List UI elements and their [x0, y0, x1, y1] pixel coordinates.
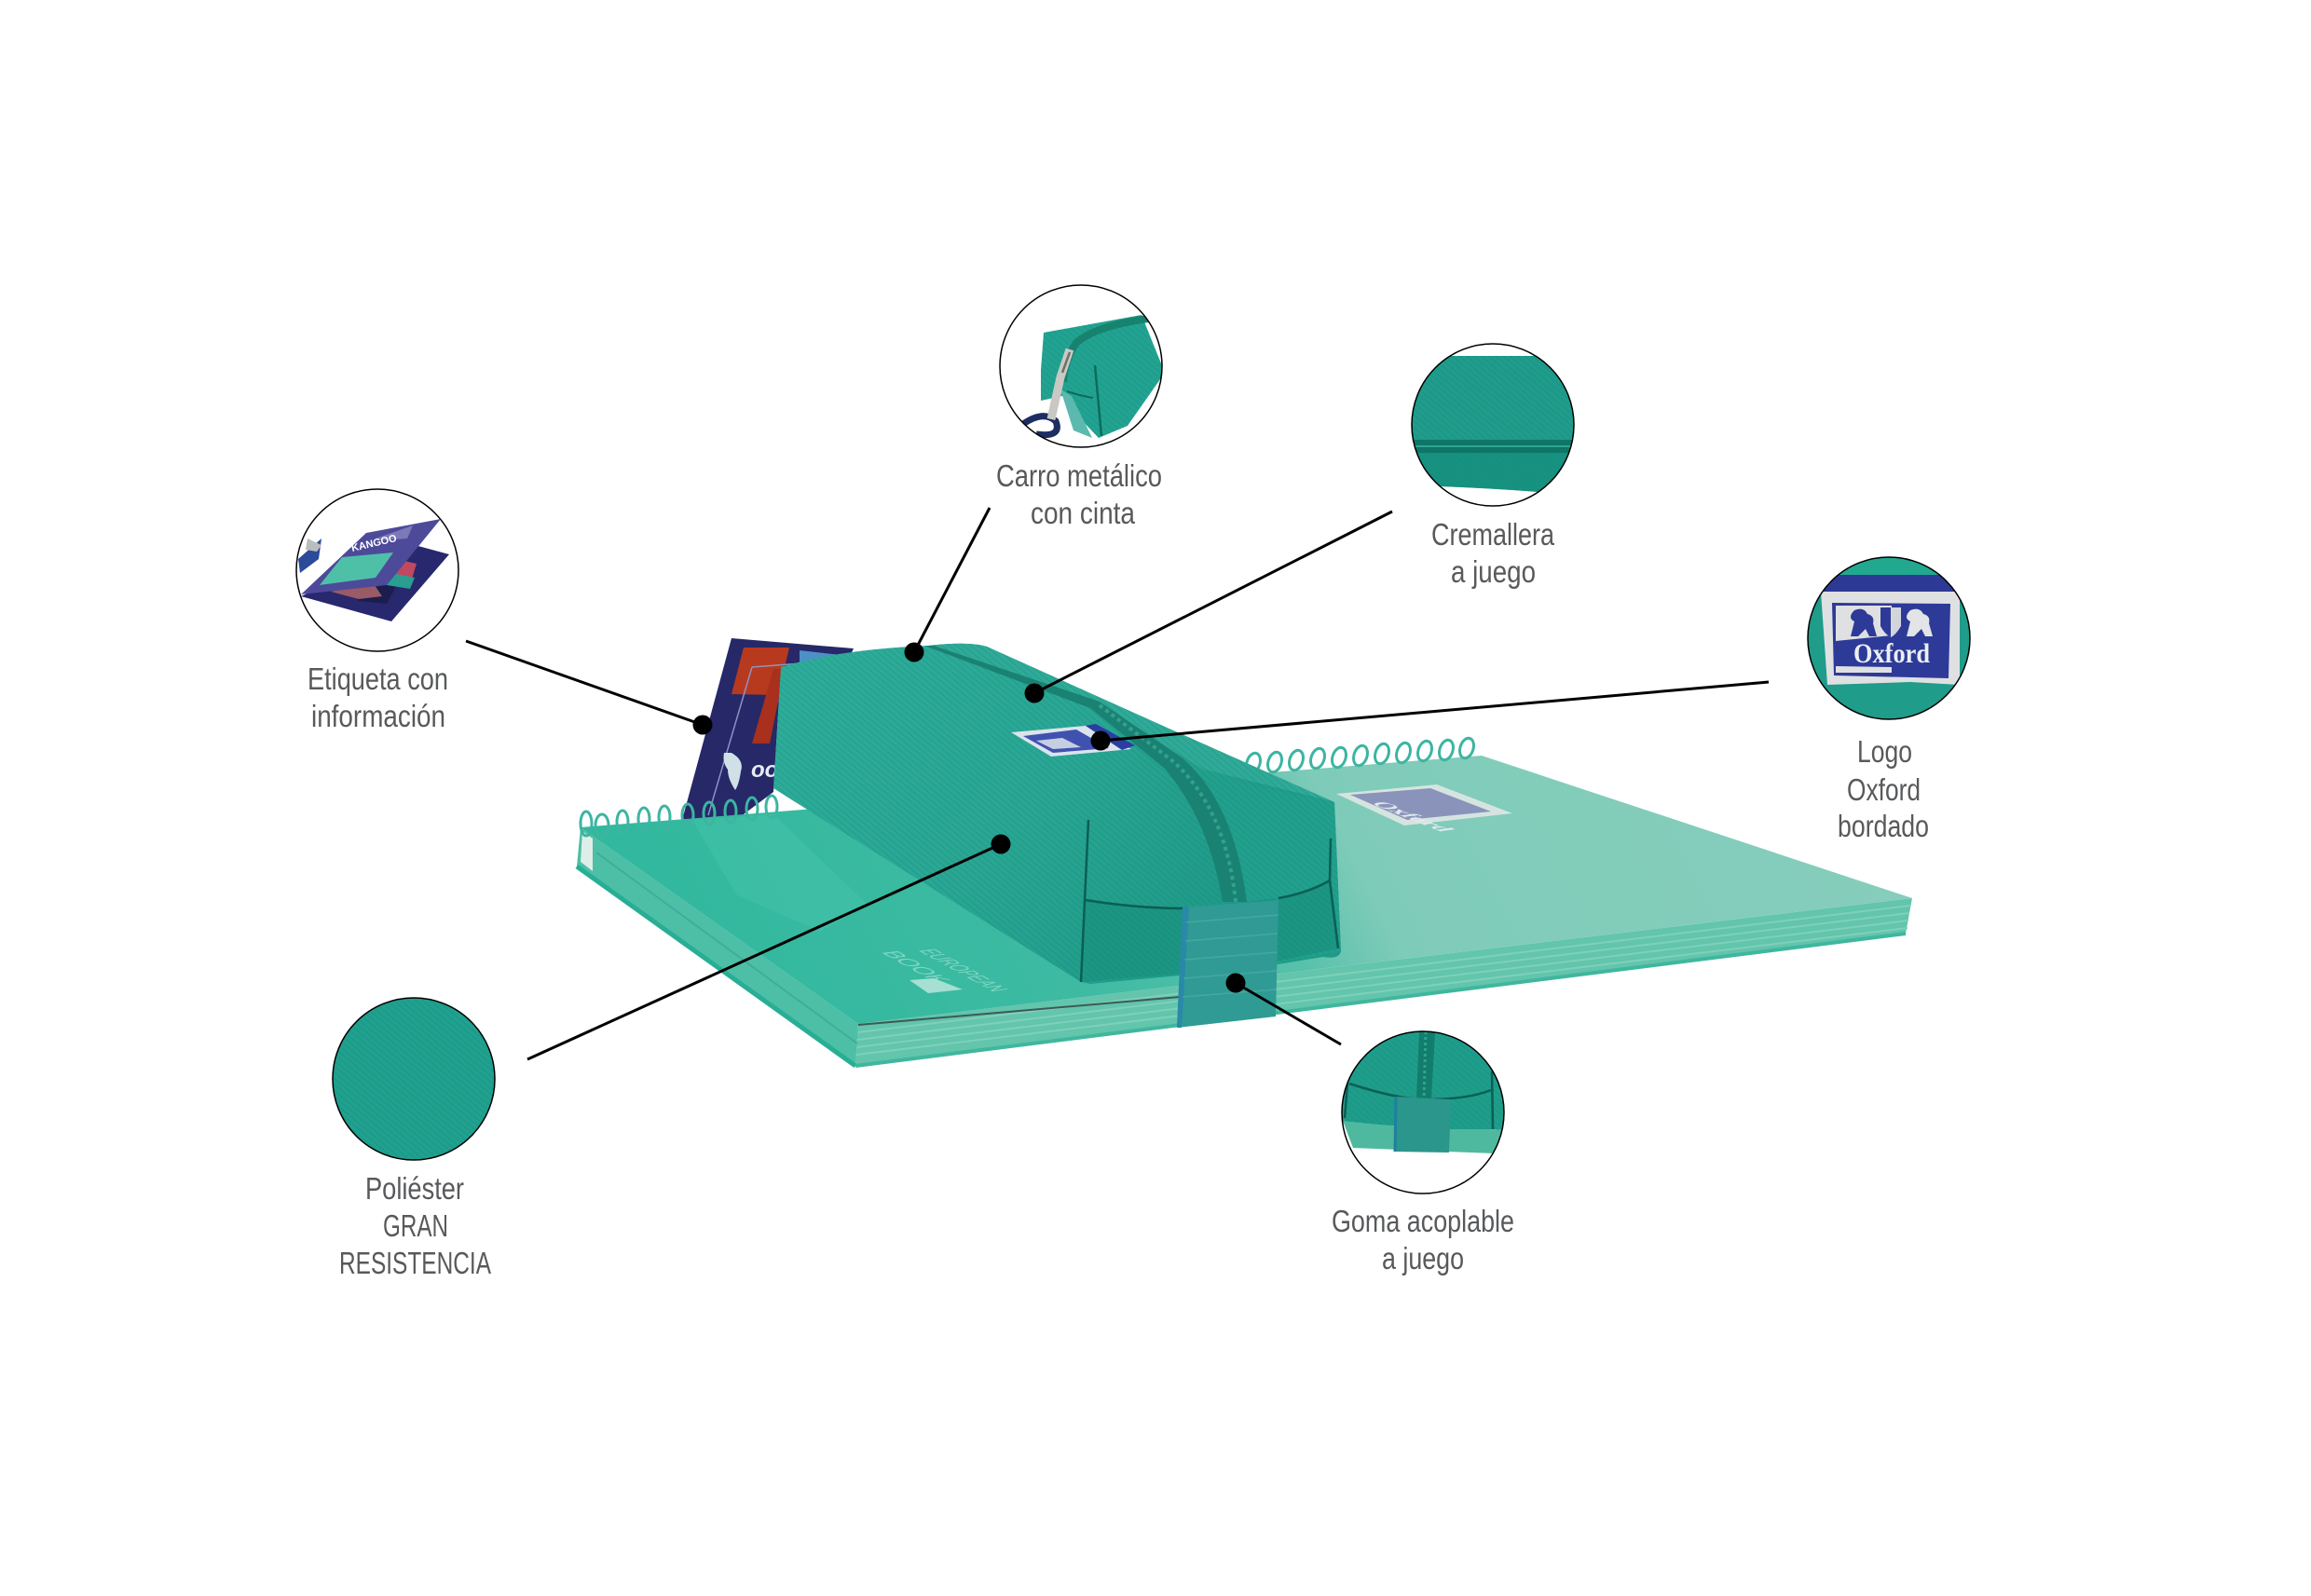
notebook cover	[581, 756, 1912, 1024]
callout: Carro metálico con cinta	[904, 285, 1165, 662]
leader line	[527, 844, 1001, 1059]
hang tag: oo	[751, 757, 778, 783]
leader line	[1101, 682, 1769, 741]
label: Etiqueta con	[308, 662, 448, 696]
cover print: European Book	[875, 948, 1013, 993]
label: Carro metálico	[996, 458, 1162, 493]
notebook logo patch: Oxford	[1364, 800, 1459, 832]
elastic band	[1177, 900, 1279, 1028]
case fabric texture	[773, 644, 1341, 982]
callout: Logo Oxford bordado	[1090, 554, 1972, 843]
label: a juego	[1451, 554, 1536, 589]
callout: Poliéster gran resistencia	[333, 835, 1010, 1280]
callout: Cremallera a juego	[1025, 344, 1579, 703]
label: Logo	[1857, 734, 1912, 769]
notebook logo patch	[1336, 784, 1512, 832]
label: Cremallera	[1431, 517, 1555, 552]
label	[1838, 734, 1929, 843]
notebook spine side	[577, 827, 858, 1066]
pencil case	[773, 644, 1341, 1028]
label: Oxford	[1847, 772, 1921, 807]
detail circle: zipper	[1413, 356, 1573, 492]
label: Poliéster	[365, 1171, 464, 1206]
leader line	[466, 641, 703, 725]
callout: Etiqueta con información	[296, 489, 712, 734]
label	[1431, 517, 1555, 589]
label: a juego	[1382, 1241, 1464, 1275]
label: RESISTENCIA	[339, 1246, 491, 1280]
callout: Goma acoplable a juego	[1226, 973, 1514, 1275]
label: GRAN	[383, 1208, 448, 1243]
label: Goma acoplable	[1332, 1204, 1514, 1238]
leader line	[1034, 512, 1392, 693]
anchor dot	[991, 835, 1010, 853]
label	[1332, 1204, 1514, 1275]
case seams	[1081, 820, 1338, 982]
leader line	[914, 508, 990, 652]
detail circle: embroidered logo: Oxford	[1853, 638, 1930, 669]
detail circle: zipper pull	[1021, 315, 1161, 438]
right spiral binding	[1244, 736, 1476, 775]
case silhouette	[773, 644, 1341, 984]
label: información	[311, 699, 445, 733]
anchor dot	[1226, 973, 1245, 993]
label	[308, 662, 448, 733]
detail circle: hang tag: KANGOO	[350, 533, 398, 554]
label	[339, 1171, 491, 1280]
embroidered Oxford label	[1011, 724, 1135, 757]
case back panel	[928, 644, 1334, 802]
zipper	[924, 646, 1247, 902]
label: con cinta	[1031, 496, 1136, 530]
anchor dot	[693, 716, 712, 734]
anchor dot	[1090, 730, 1111, 751]
label	[996, 458, 1162, 530]
detail circle: elastic band	[1342, 1032, 1504, 1153]
cover print: European Book: BOOK	[875, 949, 956, 984]
cover print: European Book: EUROPEAN	[912, 948, 1013, 992]
left spiral binding	[581, 796, 777, 837]
detail circle: embroidered logo	[1806, 554, 1972, 722]
detail circle: hang tag	[298, 519, 449, 621]
leader line	[1236, 983, 1341, 1044]
anchor dot	[904, 643, 924, 662]
cover gloss	[692, 814, 867, 932]
case end panel	[1190, 772, 1341, 969]
anchor dot	[1025, 684, 1044, 703]
notebook page block front	[855, 898, 1912, 1066]
label: bordado	[1838, 809, 1929, 843]
product photo: notebook and pencil case	[577, 638, 1912, 1066]
notebook edge line	[858, 997, 1180, 1025]
notebook	[577, 756, 1912, 1066]
detail circle: polyester fabric	[333, 998, 495, 1160]
hang tag	[682, 638, 854, 820]
case lower end flap	[1081, 880, 1338, 982]
